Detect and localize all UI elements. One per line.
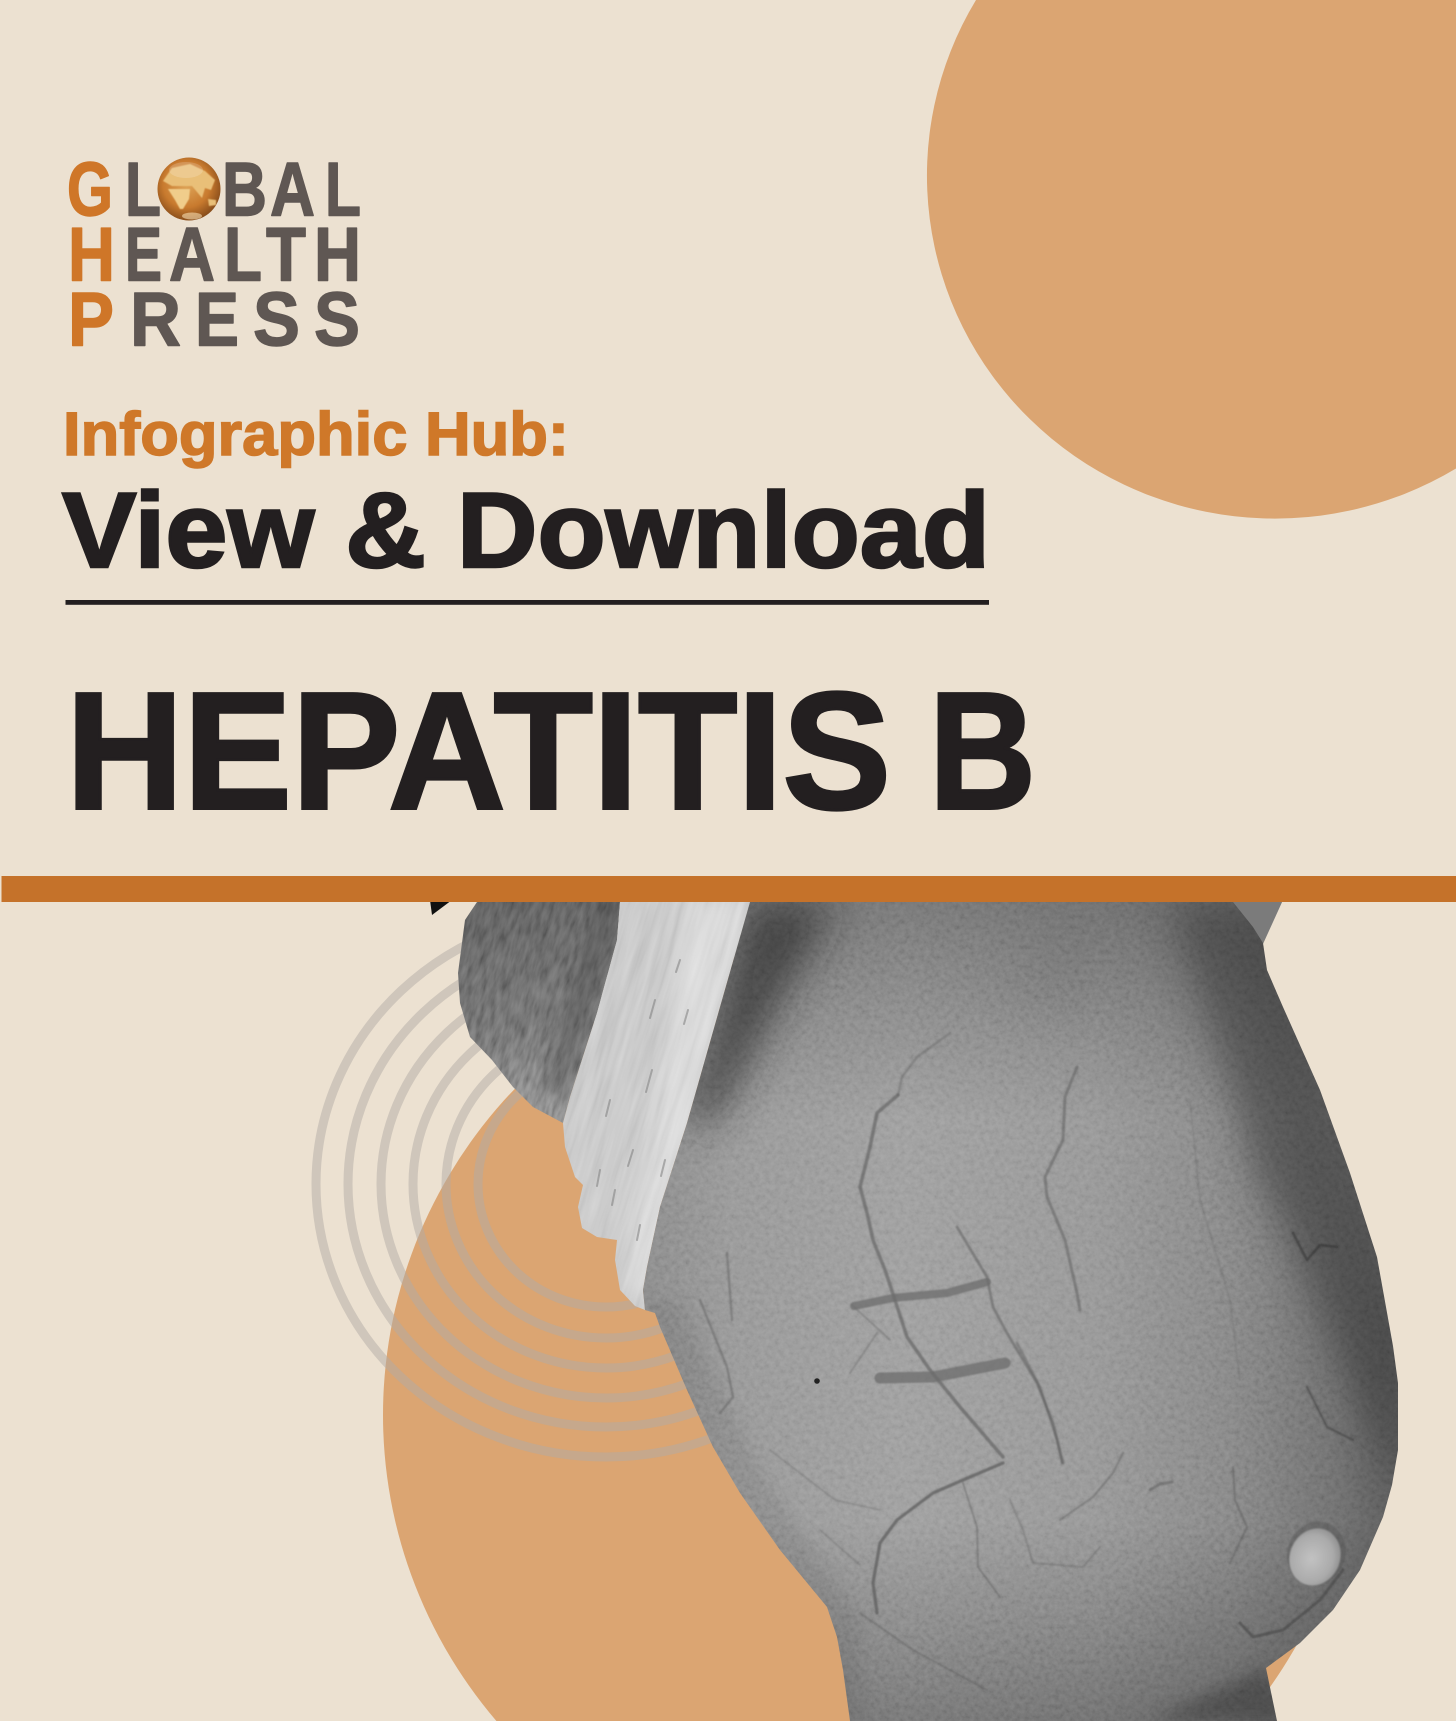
heading: View & Download: View & Download	[62, 470, 990, 590]
icon: globe	[158, 158, 220, 220]
logo: Global Health Press: S	[314, 278, 360, 362]
decorative circle: top right	[927, 0, 1456, 519]
logo: Global Health Press: E	[195, 278, 239, 362]
logo: Global Health Press: T	[266, 212, 306, 298]
logo: Global Health Press: G	[67, 148, 113, 232]
logo: Global Health Press: P	[68, 278, 114, 362]
pen marks	[854, 1282, 1005, 1378]
mole	[814, 1378, 820, 1384]
title: Hepatitis B: B	[929, 658, 1036, 844]
far-side clothing	[1233, 902, 1282, 944]
logo: Global Health Press: A	[169, 212, 215, 298]
logo: Global Health Press: L	[325, 148, 361, 232]
logo: Global Health Press: L	[224, 212, 262, 298]
logo: Global Health Press: L	[125, 148, 161, 232]
white towel	[563, 902, 750, 1310]
logo: Global Health Press: H	[68, 212, 115, 298]
orange divider bar	[2, 876, 1456, 902]
decorative concentric rings	[316, 911, 896, 1457]
logo: Global Health Press: E	[125, 212, 162, 298]
logo: Global Health Press: B	[222, 148, 267, 232]
logo: Global Health Press: S	[253, 278, 300, 362]
title: Hepatitis B: HEPATITIS	[66, 658, 891, 844]
logo: Global Health Press: A	[270, 148, 315, 232]
skin	[630, 902, 1410, 1721]
heading underline	[66, 600, 989, 605]
photo: swollen abdomen in greyscale	[430, 902, 1398, 1721]
grey sweater	[458, 902, 620, 1123]
black fragment at top of photo	[430, 902, 450, 915]
decorative circle: lower orange	[383, 938, 1357, 1721]
logo: Global Health Press: H	[314, 212, 361, 298]
logo: Global Health Press: R	[130, 278, 181, 362]
veins	[700, 1033, 1353, 1690]
eyebrow heading: Infographic Hub: Infographic Hub:	[63, 400, 569, 468]
logo: Global Health Press	[67, 148, 361, 362]
navel	[1287, 1522, 1346, 1586]
